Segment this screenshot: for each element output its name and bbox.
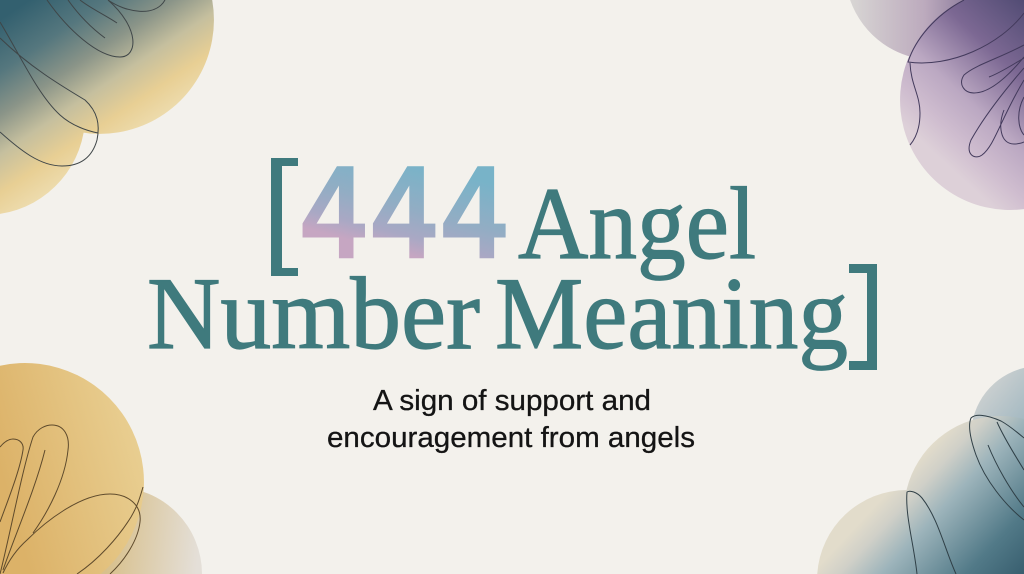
decoration: bottom-left circles with petals	[0, 363, 202, 574]
title	[147, 146, 877, 371]
title line Number Meaning	[147, 257, 848, 371]
subtitle	[327, 385, 695, 454]
subtitle: encouragement from angels	[327, 422, 695, 454]
decoration: top-left circles with petals	[0, 0, 214, 214]
decoration: bottom-right circles with petals	[817, 368, 1024, 574]
subtitle: A sign of support and	[373, 385, 651, 417]
number 444: 444	[299, 146, 510, 285]
title line Number Meaning: Number	[147, 257, 480, 371]
opening bracket	[271, 158, 298, 276]
decoration: top-right circles with petals	[850, 0, 1024, 210]
closing bracket	[849, 264, 877, 370]
title line Number Meaning: Meaning	[495, 257, 848, 371]
title word Angel: Angel	[518, 167, 756, 281]
